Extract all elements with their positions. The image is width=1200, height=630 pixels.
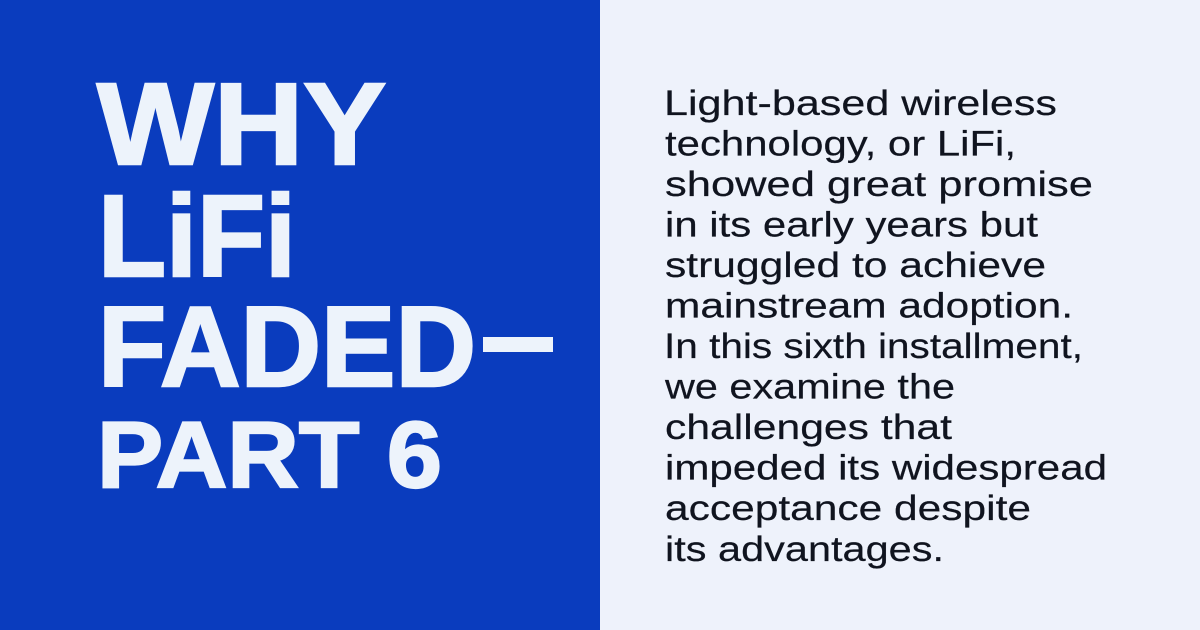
- body text: acceptance despite: [665, 489, 1031, 528]
- title: PART 6: [97, 402, 442, 507]
- body text: struggled to achieve: [665, 246, 1046, 285]
- body text: [664, 84, 1107, 569]
- body text: we examine the: [664, 368, 955, 406]
- title: FADED: [98, 284, 476, 411]
- body text: in its early years but: [665, 206, 1038, 244]
- body text: Light-based wireless: [664, 84, 1057, 123]
- panel: blue title background: [0, 0, 600, 630]
- body text: impeded its widespread: [665, 448, 1107, 488]
- body text: mainstream adoption.: [665, 286, 1073, 326]
- title: WHY: [97, 59, 386, 189]
- body text: showed great promise: [665, 165, 1093, 204]
- body text: In this sixth installment,: [664, 327, 1083, 366]
- panel: light text background: [600, 0, 1200, 630]
- body text: its advantages.: [665, 530, 944, 569]
- title: [97, 59, 553, 507]
- body text: challenges that: [665, 408, 952, 447]
- body text: technology, or LiFi,: [665, 124, 1016, 164]
- title: LiFi: [98, 171, 296, 301]
